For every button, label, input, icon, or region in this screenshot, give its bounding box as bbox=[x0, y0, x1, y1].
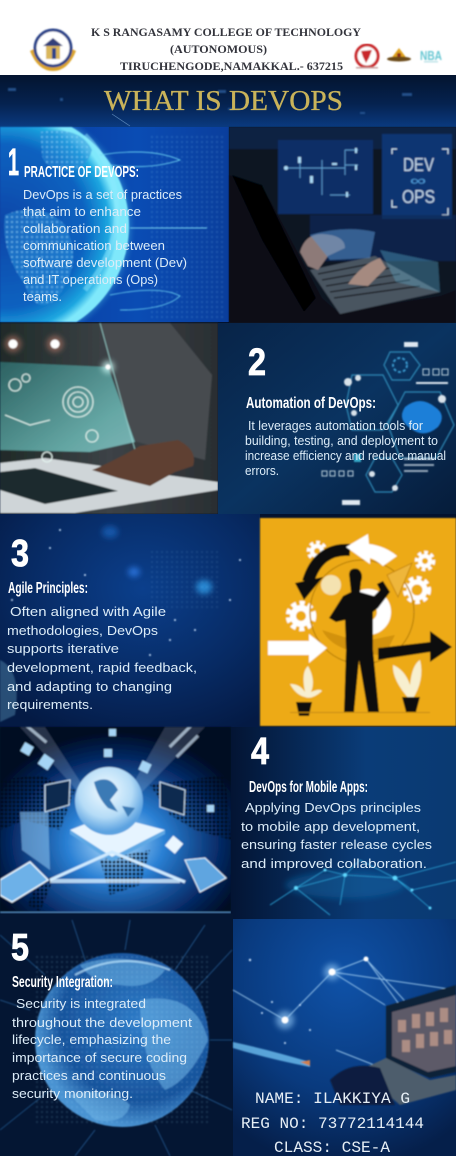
body text: security integration: practices and continuous bbox=[12, 1068, 167, 1083]
body text: practice of DevOps: teams. bbox=[23, 289, 62, 304]
dark world map bbox=[0, 775, 231, 912]
body text: agile principles: requirements. bbox=[7, 697, 93, 712]
body text: security integration bbox=[12, 996, 192, 1101]
panel 6: student details bbox=[233, 919, 456, 1156]
panel 3: agile principles bbox=[0, 514, 260, 727]
body text: security integration: importance of secure coding bbox=[12, 1050, 187, 1065]
panel 2: automation of DevOps bbox=[218, 323, 456, 514]
body text: practice of DevOps: and IT operations (Ops) bbox=[23, 272, 158, 287]
register number: REG NO: 73772114144 bbox=[241, 1115, 424, 1133]
college name text: TIRUCHENGODE,NAMAKKAL.- 637215 bbox=[120, 59, 343, 73]
laptop screen bbox=[386, 985, 456, 1078]
body text: DevOps for mobile apps: to mobile app development, bbox=[241, 819, 420, 834]
man silhouette bbox=[329, 569, 390, 712]
college name text bbox=[91, 25, 361, 73]
globe bbox=[75, 767, 143, 835]
body text: practice of DevOps: communication between bbox=[23, 238, 165, 253]
white arrow bbox=[346, 534, 397, 566]
body text: practice of DevOps: that aim to enhance bbox=[23, 204, 141, 219]
heading: agile principles: Agile Principles: bbox=[8, 580, 88, 597]
right plant bbox=[393, 660, 421, 712]
body text: security integration: Security is integrated bbox=[16, 996, 146, 1011]
student name: NAME: ILAKKIYA G bbox=[255, 1090, 410, 1108]
body text: automation of DevOps: It leverages automation tools for bbox=[248, 418, 424, 433]
number 4: 4 bbox=[251, 731, 269, 773]
illustration: agile cycle with man on yellow bbox=[260, 518, 456, 726]
illustration: network globe with laptops bbox=[0, 723, 231, 914]
panel 1: practice of DevOps bbox=[0, 126, 229, 323]
body text: automation of DevOps: errors. bbox=[245, 463, 279, 478]
launch arrow bbox=[378, 631, 452, 662]
illustration: starfield bbox=[0, 526, 241, 722]
body text: practice of DevOps bbox=[23, 187, 187, 304]
body text: DevOps for mobile apps: Applying DevOps principles bbox=[245, 800, 422, 815]
title band bbox=[0, 75, 456, 127]
panel 5: security integration bbox=[0, 914, 233, 1156]
number 2: 2 bbox=[248, 342, 266, 384]
hologram: DEV OPS screen: OPS bbox=[402, 187, 435, 207]
left plant bbox=[290, 666, 322, 716]
body text: security integration: lifecycle, emphasizing the bbox=[12, 1032, 171, 1047]
light rays bbox=[19, 726, 206, 792]
body text: agile principles bbox=[7, 604, 197, 712]
illustration: hexagon tech graphic bbox=[322, 342, 454, 505]
photo: laptop with DevOps hologram bbox=[229, 127, 456, 323]
laptop bbox=[229, 175, 456, 323]
floating squares bbox=[20, 729, 214, 812]
outline arrow bbox=[387, 563, 412, 597]
illustration: cyan network mesh bbox=[270, 860, 456, 915]
black arrow bbox=[308, 550, 350, 582]
body text: practice of DevOps: collaboration and bbox=[23, 221, 127, 236]
icon: accreditation logos bbox=[356, 45, 442, 68]
laptop base bbox=[0, 458, 218, 513]
title text: WHAT IS DEVOPS bbox=[104, 86, 343, 117]
hands bbox=[300, 229, 440, 292]
hologram screen bbox=[0, 323, 135, 462]
body text: agile principles: methodologies, DevOps bbox=[7, 623, 159, 638]
heading: DevOps for mobile apps: DevOps for Mobile Apps: bbox=[249, 779, 368, 796]
body text: agile principles: development, rapid feedback, bbox=[7, 660, 197, 675]
icon: accreditation logos: NBA bbox=[420, 49, 442, 63]
panel 4: DevOps for mobile apps bbox=[231, 727, 456, 919]
illustration: blue earth with rays bbox=[0, 920, 232, 1156]
body text: automation of DevOps: building, testing, and deployment to bbox=[245, 433, 438, 448]
body text: automation of DevOps bbox=[245, 418, 446, 478]
college name text: K S RANGASAMY COLLEGE OF TECHNOLOGY bbox=[91, 25, 361, 39]
body text: agile principles: Often aligned with Agile bbox=[10, 604, 166, 619]
hologram: DEV OPS screen: ∞ bbox=[410, 173, 426, 188]
body text: DevOps for mobile apps: and improved collaboration. bbox=[241, 856, 427, 871]
hologram: DEV OPS screen: DEV bbox=[403, 155, 434, 175]
number 1: 1 bbox=[8, 142, 19, 184]
hand bbox=[92, 440, 194, 486]
body text: security integration: security monitoring. bbox=[12, 1086, 133, 1101]
header: college letterhead bbox=[0, 0, 456, 75]
laptops bbox=[45, 780, 70, 812]
cycle ring bbox=[310, 560, 414, 664]
hologram: DEV OPS screen bbox=[382, 134, 452, 219]
body text: DevOps for mobile apps bbox=[241, 800, 433, 871]
photo: hand on laptop with hologram bbox=[0, 323, 218, 514]
illustration: glowing globe bbox=[0, 126, 223, 323]
heading: automation of DevOps: Automation of DevOps: bbox=[246, 395, 376, 412]
body text: agile principles: supports iterative bbox=[7, 641, 119, 656]
platform bbox=[70, 821, 166, 858]
number 3: 3 bbox=[11, 533, 29, 575]
body text: agile principles: and adapting to changing bbox=[7, 679, 172, 694]
gears bbox=[288, 542, 434, 629]
hologram: flow diagram screen bbox=[278, 140, 373, 214]
body text: DevOps for mobile apps: ensuring faster release cycles bbox=[241, 837, 433, 852]
icon: college crest bbox=[30, 30, 76, 71]
body text: security integration: throughout the development bbox=[12, 1015, 192, 1030]
heading: security integration: Security Integration: bbox=[12, 974, 113, 991]
college name text: (AUTONOMOUS) bbox=[170, 42, 267, 56]
heading: practice of DevOps: PRACTICE OF DEVOPS: bbox=[24, 164, 139, 181]
number 5: 5 bbox=[11, 927, 29, 969]
illustration: laptop with network bbox=[233, 956, 456, 1105]
plan arrow bbox=[268, 634, 327, 663]
body text: practice of DevOps: software development (Dev) bbox=[23, 255, 187, 270]
body text: practice of DevOps: DevOps is a set of practices bbox=[23, 187, 182, 202]
